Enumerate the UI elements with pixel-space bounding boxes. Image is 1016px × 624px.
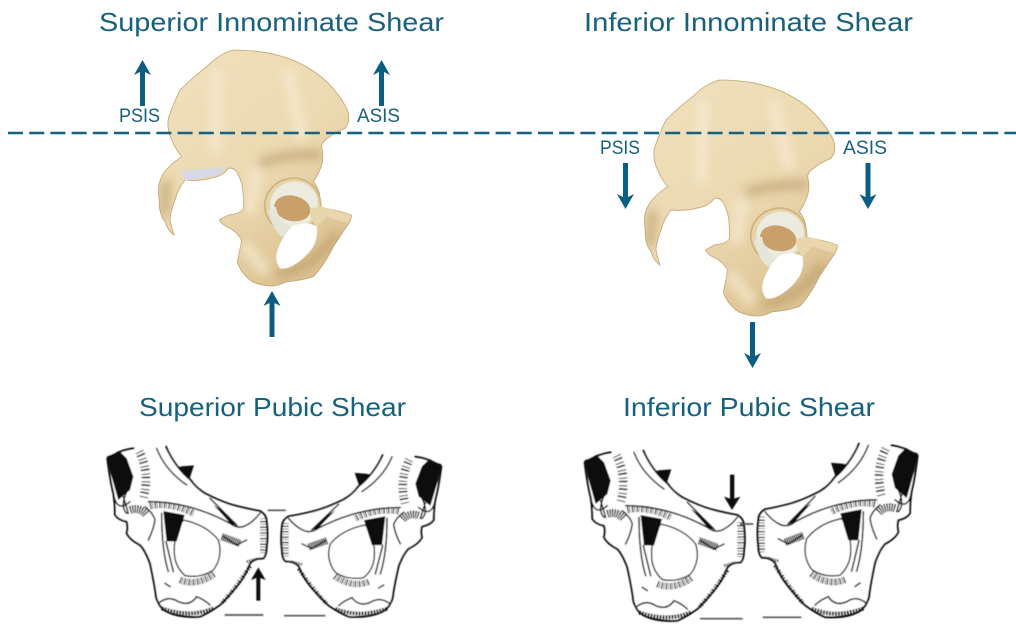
level markers xyxy=(700,524,801,619)
label: PSIS superior: PSIS xyxy=(119,106,160,127)
arrow: ASIS down xyxy=(860,163,876,209)
dashed reference line xyxy=(8,132,1016,134)
illustration: inferior innominate hip bone xyxy=(644,80,838,316)
label: ASIS inferior: ASIS xyxy=(843,138,887,159)
right pubic bone xyxy=(757,444,918,617)
illustration: inferior pubic shear pelvis xyxy=(585,444,918,621)
left pubic bone xyxy=(585,451,745,621)
illustration: superior innominate hip bone xyxy=(158,50,352,286)
title: Superior Innominate Shear: Superior Innominate Shear xyxy=(99,7,444,37)
right pubic bone xyxy=(281,455,441,617)
level markers xyxy=(225,510,325,616)
label: PSIS inferior: PSIS xyxy=(600,138,640,159)
label: ASIS superior: ASIS xyxy=(357,106,400,127)
title: Inferior Innominate Shear: Inferior Innominate Shear xyxy=(584,7,913,37)
title: Inferior Pubic Shear: Inferior Pubic Shear xyxy=(623,392,875,422)
arrow: black up xyxy=(251,567,266,601)
title: Superior Pubic Shear: Superior Pubic Shear xyxy=(139,392,406,422)
arrow: PSIS up xyxy=(134,60,151,106)
arrow: pubis up xyxy=(264,291,280,337)
left pubic bone xyxy=(107,447,267,617)
arrow: pubis down xyxy=(744,322,761,368)
arrow: black down xyxy=(724,475,740,510)
arrow: ASIS up xyxy=(373,60,390,106)
illustration: superior pubic shear pelvis xyxy=(107,447,441,617)
arrow: PSIS down xyxy=(617,163,634,209)
